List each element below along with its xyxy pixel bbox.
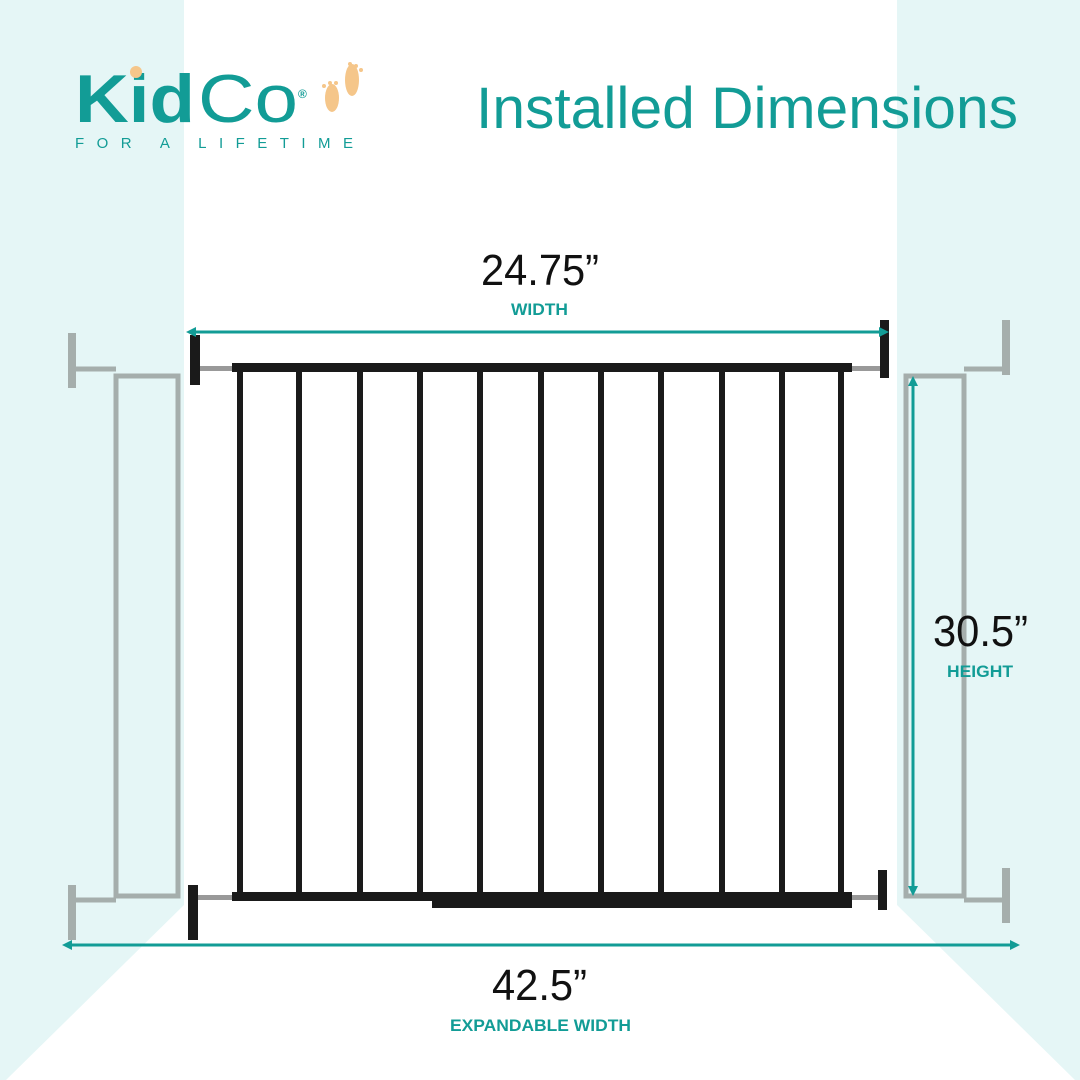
label: width (481, 246, 599, 319)
ghost gate left (68, 333, 178, 940)
ghost gate right (906, 320, 1010, 923)
label: expandable width: 42.5” (492, 961, 587, 1010)
gate (188, 320, 889, 940)
arrow: height (908, 376, 918, 896)
label: height (933, 607, 1028, 681)
arrow: expandable width (62, 940, 1020, 950)
logo: Kid (75, 61, 195, 137)
logo (75, 61, 363, 152)
logo: Co (198, 61, 298, 137)
label: expandable width (450, 961, 631, 1035)
logo: ® (298, 87, 307, 101)
label: width: 24.75” (481, 246, 599, 295)
logo: FOR A LIFETIME (75, 135, 353, 152)
label: expandable width: EXPANDABLE WIDTH (450, 1016, 631, 1035)
title: Installed Dimensions (476, 76, 1018, 141)
label: height: HEIGHT (947, 662, 1014, 681)
icon: feet (322, 62, 363, 112)
arrow: width (186, 327, 889, 337)
label: height: 30.5” (933, 607, 1028, 656)
label: width: WIDTH (511, 300, 568, 319)
